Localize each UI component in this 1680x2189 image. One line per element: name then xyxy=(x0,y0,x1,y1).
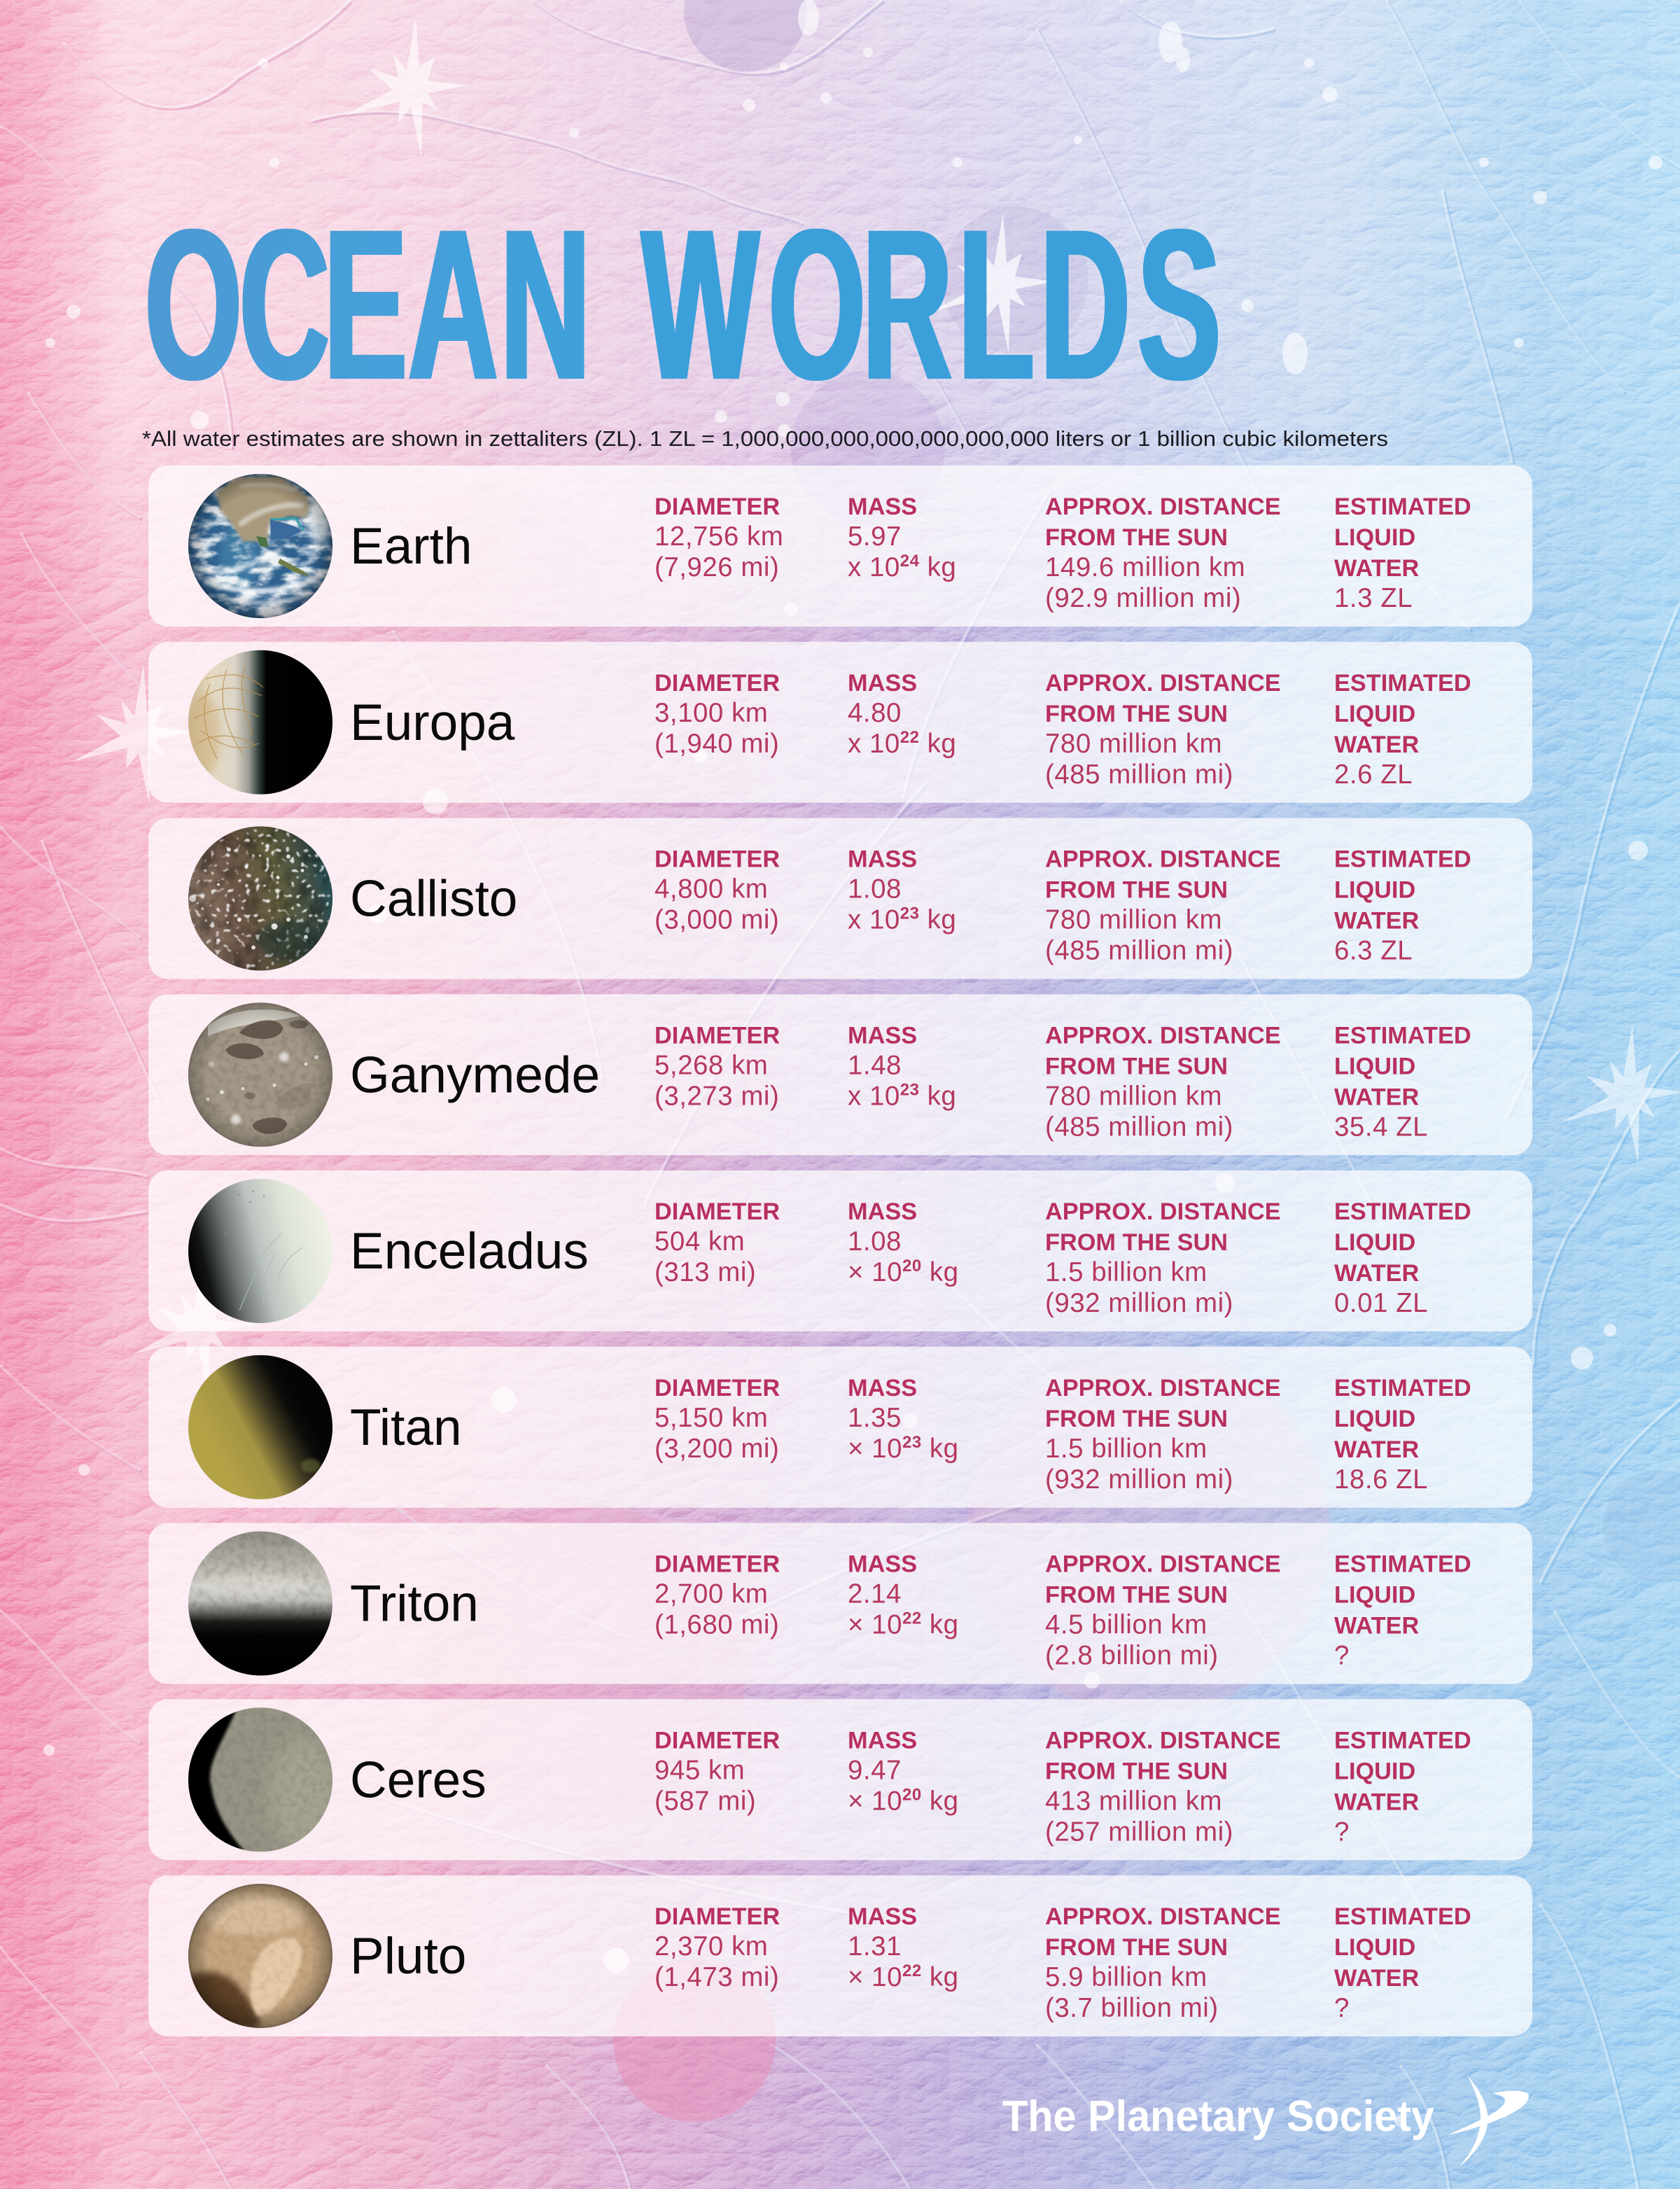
stats: Callisto: WATER xyxy=(1334,907,1420,934)
planet: Triton xyxy=(188,1532,332,1676)
stats: Pluto: kg xyxy=(922,1962,959,1992)
footnote on zettaliters: *All water estimates are shown in zettaliters (ZL). 1 ZL = 1,000,000,000,000,000,000,000 liters or 1 billion cubic kilometers xyxy=(142,426,1388,451)
stats: Ceres: kg xyxy=(922,1786,959,1816)
planet: Ganymede xyxy=(188,1002,332,1147)
stats: Callisto: (3,000 mi) xyxy=(654,904,779,935)
stats: Europa: MASS xyxy=(848,670,917,697)
stats: Pluto: APPROX. DISTANCE xyxy=(1045,1903,1281,1930)
stats: Ganymede: APPROX. DISTANCE xyxy=(1045,1022,1281,1049)
stats: Ceres: × 10 xyxy=(848,1785,959,1816)
stats: Titan: kg xyxy=(922,1434,959,1464)
row: Europa xyxy=(148,642,1532,803)
footer wordmark: The Planetary Society: The Planetary Society xyxy=(1002,2092,1434,2141)
stats: Ganymede: (3,273 mi) xyxy=(654,1081,779,1111)
stats: Earth: FROM THE SUN xyxy=(1045,524,1228,551)
stats: Titan: WATER xyxy=(1334,1436,1420,1463)
stats: Triton: × 10 xyxy=(848,1609,959,1639)
card: Ceres xyxy=(148,1699,1532,1860)
stats: Enceladus: 1.5 billion km xyxy=(1045,1257,1208,1287)
stats: Europa: DIAMETER xyxy=(654,670,780,697)
stats: Europa: WATER xyxy=(1334,732,1420,758)
row: Earth xyxy=(148,466,1532,627)
stats: Europa: LIQUID xyxy=(1334,701,1415,727)
stats: Titan: × 10 xyxy=(848,1433,959,1464)
stats: Europa: 22 xyxy=(900,728,919,747)
stats: Earth xyxy=(654,494,1471,613)
stats: Enceladus: 0.01 ZL xyxy=(1334,1288,1428,1318)
stats: Titan: DIAMETER xyxy=(654,1375,780,1401)
stats: Earth: LIQUID xyxy=(1334,524,1415,551)
stats: Enceladus: kg xyxy=(922,1257,959,1287)
stats: Titan: 23 xyxy=(902,1433,922,1452)
stats: Triton: 2.14 xyxy=(848,1579,902,1609)
stats: Titan: APPROX. DISTANCE xyxy=(1045,1375,1281,1401)
stats: Callisto: DIAMETER xyxy=(654,846,780,872)
stats: Titan: ESTIMATED xyxy=(1334,1375,1471,1401)
stats: Callisto xyxy=(654,846,1471,966)
name: Triton: Triton xyxy=(350,1575,479,1632)
stats: Triton: kg xyxy=(922,1610,959,1639)
stats: Ganymede: (485 million mi) xyxy=(1045,1112,1233,1142)
stats: Ceres: (587 mi) xyxy=(654,1786,756,1816)
name: Ganymede: Ganymede xyxy=(350,1047,600,1103)
stats: Pluto: DIAMETER xyxy=(654,1903,780,1930)
stats: Pluto: × 10 xyxy=(848,1961,959,1992)
card: Earth xyxy=(148,466,1532,627)
stats: Triton: DIAMETER xyxy=(654,1551,780,1578)
stats: Ceres: 413 million km xyxy=(1045,1786,1222,1816)
stats: Enceladus: WATER xyxy=(1334,1260,1420,1287)
stats: Callisto: ESTIMATED xyxy=(1334,846,1471,872)
stats: Pluto: 2,370 km xyxy=(654,1931,768,1961)
stats: Enceladus: 504 km xyxy=(654,1226,745,1257)
stats: Europa: 780 million km xyxy=(1045,729,1222,759)
stats: Ganymede: 23 xyxy=(900,1080,919,1099)
stats: Titan: (3,200 mi) xyxy=(654,1434,779,1464)
stats: Enceladus: ESTIMATED xyxy=(1334,1198,1471,1225)
name: Callisto: Callisto xyxy=(350,871,517,927)
stats: Triton: 22 xyxy=(902,1609,922,1628)
stats: Europa: FROM THE SUN xyxy=(1045,701,1228,727)
name: Europa: Europa xyxy=(350,694,515,751)
card: Titan xyxy=(148,1347,1532,1508)
stats: Callisto: LIQUID xyxy=(1334,876,1415,903)
stats: Pluto: LIQUID xyxy=(1334,1934,1415,1961)
stats: Pluto xyxy=(654,1903,1471,2023)
stats: Triton: 4.5 billion km xyxy=(1045,1610,1208,1639)
stats: Earth: x 10 xyxy=(848,552,956,582)
stats: Ganymede: 1.48 xyxy=(848,1050,902,1080)
stats: Ganymede: 35.4 ZL xyxy=(1334,1112,1428,1142)
stats: Pluto: ESTIMATED xyxy=(1334,1903,1471,1930)
row: Callisto xyxy=(148,818,1532,979)
stats: Ganymede: ESTIMATED xyxy=(1334,1022,1471,1049)
stats: Ceres: WATER xyxy=(1334,1789,1420,1815)
stats: Enceladus: APPROX. DISTANCE xyxy=(1045,1198,1281,1225)
stats: Enceladus: LIQUID xyxy=(1334,1229,1415,1256)
stats: Triton: WATER xyxy=(1334,1613,1420,1639)
row: Ceres xyxy=(148,1699,1532,1860)
stats: Earth: 5.97 xyxy=(848,522,902,552)
stats: Ceres: 9.47 xyxy=(848,1755,902,1785)
stats: Pluto: (3.7 billion mi) xyxy=(1045,1993,1219,2023)
stats: Callisto: 780 million km xyxy=(1045,904,1222,935)
stats: Ganymede: 780 million km xyxy=(1045,1081,1222,1111)
stats: Enceladus: MASS xyxy=(848,1198,917,1225)
stats: Ganymede: FROM THE SUN xyxy=(1045,1053,1228,1079)
stats: Earth: 1.3 ZL xyxy=(1334,583,1413,613)
stats: Enceladus: (932 million mi) xyxy=(1045,1288,1233,1318)
stats: Earth: DIAMETER xyxy=(654,494,780,520)
stats: Europa: APPROX. DISTANCE xyxy=(1045,670,1281,697)
stats: Ceres: 945 km xyxy=(654,1755,745,1785)
stats: Earth: ESTIMATED xyxy=(1334,494,1471,520)
stats: Titan: (932 million mi) xyxy=(1045,1464,1233,1495)
stats: Enceladus: FROM THE SUN xyxy=(1045,1229,1228,1256)
stats: Ganymede xyxy=(654,1022,1471,1142)
stats: Europa: 3,100 km xyxy=(654,698,768,728)
name: Earth: Earth xyxy=(350,518,472,575)
stats: Titan: FROM THE SUN xyxy=(1045,1406,1228,1432)
stats: Europa: ESTIMATED xyxy=(1334,670,1471,697)
stats: Callisto: MASS xyxy=(848,846,917,872)
name: Enceladus: Enceladus xyxy=(350,1223,589,1280)
stats: Pluto: 1.31 xyxy=(848,1931,902,1961)
planet: Ceres xyxy=(183,1702,337,1856)
stats: Pluto: 22 xyxy=(902,1961,922,1980)
stats: Callisto: x 10 xyxy=(848,904,956,935)
stats: Ganymede: 5,268 km xyxy=(654,1050,768,1080)
stats: Triton: APPROX. DISTANCE xyxy=(1045,1551,1281,1578)
stats: Callisto: 6.3 ZL xyxy=(1334,935,1413,966)
stats: Callisto: APPROX. DISTANCE xyxy=(1045,846,1281,872)
stats: Ceres: (257 million mi) xyxy=(1045,1817,1233,1847)
stats: Enceladus: DIAMETER xyxy=(654,1198,780,1225)
stats: Europa: 2.6 ZL xyxy=(1334,760,1413,790)
stats: Earth: 12,756 km xyxy=(654,522,783,552)
planet: Enceladus xyxy=(188,1179,332,1323)
card: Ganymede xyxy=(148,994,1532,1155)
card: Enceladus xyxy=(148,1170,1532,1331)
row: Triton xyxy=(148,1523,1532,1684)
stats: Titan: LIQUID xyxy=(1334,1406,1415,1432)
stats: Earth: 24 xyxy=(900,552,920,571)
planet: Titan xyxy=(188,1355,332,1499)
stats: Triton: 2,700 km xyxy=(654,1579,768,1609)
stats: Europa: (485 million mi) xyxy=(1045,760,1233,790)
stats: Titan: 1.35 xyxy=(848,1403,902,1433)
name: Ceres: Ceres xyxy=(350,1751,486,1808)
stats: Enceladus: × 10 xyxy=(848,1257,959,1287)
stats: Europa: kg xyxy=(919,729,956,759)
planet: Callisto xyxy=(188,826,332,970)
stats: Titan: MASS xyxy=(848,1375,917,1401)
stats: Callisto: FROM THE SUN xyxy=(1045,876,1228,903)
stats: Callisto: 4,800 km xyxy=(654,874,768,904)
stats: Enceladus xyxy=(654,1198,1471,1318)
stats: Ganymede: LIQUID xyxy=(1334,1053,1415,1079)
stats: Triton: MASS xyxy=(848,1551,917,1578)
stats: Ceres: MASS xyxy=(848,1727,917,1754)
row: Enceladus xyxy=(148,1170,1532,1331)
icon: Planetary Society logo xyxy=(1448,2074,1529,2168)
stats: Earth: kg xyxy=(919,552,956,582)
stats: Pluto: (1,473 mi) xyxy=(654,1962,779,1992)
title: OCEAN WORLDS xyxy=(145,186,1221,425)
card: Pluto xyxy=(148,1875,1532,2036)
stats: Titan: 5,150 km xyxy=(654,1403,768,1433)
stats: Titan: 1.5 billion km xyxy=(1045,1434,1208,1464)
stats: Callisto: kg xyxy=(919,904,956,935)
stats: Ganymede: x 10 xyxy=(848,1080,956,1111)
stats: Pluto: MASS xyxy=(848,1903,917,1930)
planet: Europa xyxy=(188,650,332,795)
stats: Ganymede: WATER xyxy=(1334,1084,1420,1110)
stats: Ceres: 20 xyxy=(902,1785,922,1804)
stats: Ceres xyxy=(654,1727,1471,1847)
stats: Callisto: 23 xyxy=(900,904,919,923)
card: Triton xyxy=(148,1523,1532,1684)
row: Titan xyxy=(148,1347,1532,1508)
decorative translucent moons xyxy=(385,0,1680,2122)
stats: Enceladus: (313 mi) xyxy=(654,1257,756,1287)
stats: Pluto: ? xyxy=(1334,1993,1350,2023)
stats: Ceres: APPROX. DISTANCE xyxy=(1045,1727,1281,1754)
stats: Earth: WATER xyxy=(1334,555,1420,582)
stats: Europa: 4.80 xyxy=(848,698,902,728)
stats: Enceladus: 20 xyxy=(902,1257,922,1275)
stats: Ganymede: kg xyxy=(919,1081,956,1111)
name: Titan: Titan xyxy=(350,1399,462,1456)
stats: Callisto: 1.08 xyxy=(848,874,902,904)
stats: Titan: 18.6 ZL xyxy=(1334,1464,1428,1495)
name: Pluto: Pluto xyxy=(350,1928,466,1985)
stats: Europa: x 10 xyxy=(848,728,956,759)
stats: Enceladus: 1.08 xyxy=(848,1226,902,1257)
stats: Triton: (1,680 mi) xyxy=(654,1610,779,1639)
stats: Titan xyxy=(654,1375,1471,1495)
stats: Earth: MASS xyxy=(848,494,917,520)
stats: Europa xyxy=(654,670,1471,790)
stats: Ganymede: DIAMETER xyxy=(654,1022,780,1049)
decorative sparkle stars xyxy=(72,18,1680,1397)
stats: Ceres: ESTIMATED xyxy=(1334,1727,1471,1754)
stats: Triton xyxy=(654,1551,1471,1670)
row: Pluto xyxy=(148,1875,1532,2036)
stats: Europa: (1,940 mi) xyxy=(654,729,779,759)
stats: Earth: APPROX. DISTANCE xyxy=(1045,494,1281,520)
card: Europa xyxy=(148,642,1532,803)
stats: Triton: FROM THE SUN xyxy=(1045,1582,1228,1609)
planet: Pluto xyxy=(188,1884,332,2028)
stats: Triton: ESTIMATED xyxy=(1334,1551,1471,1578)
stats: Callisto: (485 million mi) xyxy=(1045,935,1233,966)
stats: Earth: (92.9 million mi) xyxy=(1045,583,1241,613)
stats: Ceres: LIQUID xyxy=(1334,1758,1415,1784)
stats: Triton: (2.8 billion mi) xyxy=(1045,1641,1219,1670)
card: Callisto xyxy=(148,818,1532,979)
stats: Earth: (7,926 mi) xyxy=(654,552,779,582)
stats: Earth: 149.6 million km xyxy=(1045,552,1245,582)
stats: Ceres: DIAMETER xyxy=(654,1727,780,1754)
stats: Triton: LIQUID xyxy=(1334,1582,1415,1609)
stats: Pluto: FROM THE SUN xyxy=(1045,1934,1228,1961)
stats: Ceres: FROM THE SUN xyxy=(1045,1758,1228,1784)
stats: Ceres: ? xyxy=(1334,1817,1350,1847)
stats: Triton: ? xyxy=(1334,1641,1350,1670)
stats: Pluto: WATER xyxy=(1334,1965,1420,1992)
stats: Ganymede: MASS xyxy=(848,1022,917,1049)
stats: Pluto: 5.9 billion km xyxy=(1045,1962,1208,1992)
planet: Earth xyxy=(188,474,332,618)
row: Ganymede xyxy=(148,994,1532,1155)
